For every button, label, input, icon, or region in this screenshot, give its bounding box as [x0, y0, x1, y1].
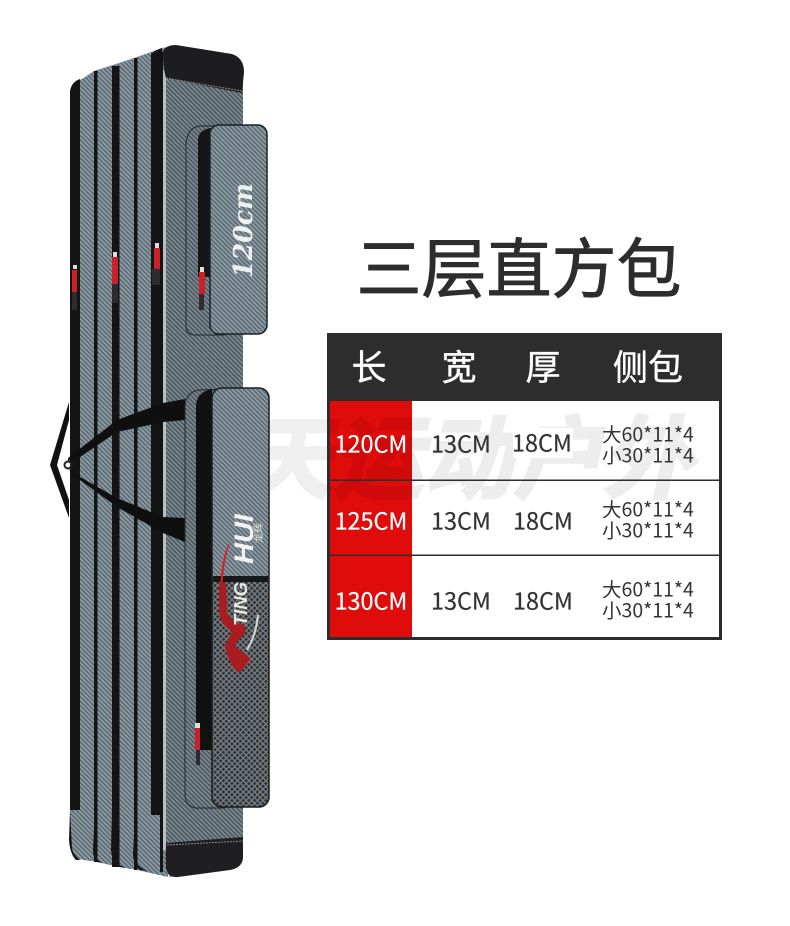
light edge strip: [162, 70, 166, 850]
size table: [327, 333, 722, 640]
zipper pullers: [72, 243, 160, 310]
row 130CM: 130CM: [335, 582, 407, 616]
row 125CM: 13CM: [431, 502, 491, 536]
upper strap: [68, 399, 185, 461]
row 125CM: 大60*11*4: [602, 494, 694, 522]
row 130CM: 13CM: [431, 582, 491, 616]
side black seams: [69, 48, 162, 871]
red length column: [330, 401, 412, 637]
small side pocket: [186, 125, 267, 335]
carrying handle: [50, 402, 69, 518]
title: 三层直方包: [356, 217, 682, 311]
row 120CM: 小30*11*4: [602, 440, 694, 468]
fishing rod bag: [50, 45, 269, 877]
table frame: [328, 334, 720, 638]
row 130CM: 大60*11*4: [602, 574, 694, 602]
watermark: 天运动户外: [237, 387, 715, 518]
lower strap: [68, 469, 185, 542]
large side pocket: [185, 388, 269, 808]
top cap: [163, 45, 244, 93]
strap ring: [64, 462, 72, 468]
row 120CM: 大60*11*4: [602, 418, 694, 448]
main bag face: [165, 48, 243, 877]
side panels with stripes: [70, 47, 168, 877]
bottom cap: [166, 837, 243, 877]
brand logo: HUI: [229, 513, 259, 564]
row 130CM: [335, 574, 694, 624]
row 120CM: 13CM: [431, 426, 491, 460]
row 125CM: 125CM: [335, 502, 407, 536]
table header: 侧包: [613, 340, 683, 391]
row 130CM: 18CM: [513, 582, 573, 616]
row 125CM: 18CM: [513, 502, 573, 536]
label 120cm: 120cm: [229, 183, 259, 278]
table header: 厚: [525, 340, 561, 391]
mesh pouch: [212, 577, 269, 807]
row 120CM: 18CM: [512, 424, 572, 458]
pocket zipper puller: [199, 267, 205, 310]
row 130CM: 小30*11*4: [602, 594, 694, 624]
row 120CM: 120CM: [335, 426, 407, 460]
brand logo: [219, 513, 265, 673]
table header: 宽: [441, 340, 477, 391]
row 120CM: [335, 418, 694, 468]
table header: [327, 333, 722, 401]
row 125CM: [335, 494, 694, 544]
brand logo: 龙辉: [250, 523, 265, 543]
brand logo: TING: [231, 582, 251, 626]
large pocket zipper puller: [195, 723, 200, 765]
table header: 长: [351, 340, 387, 391]
watermark over table: 天运动户外: [237, 387, 715, 518]
row 125CM: 小30*11*4: [602, 514, 694, 544]
